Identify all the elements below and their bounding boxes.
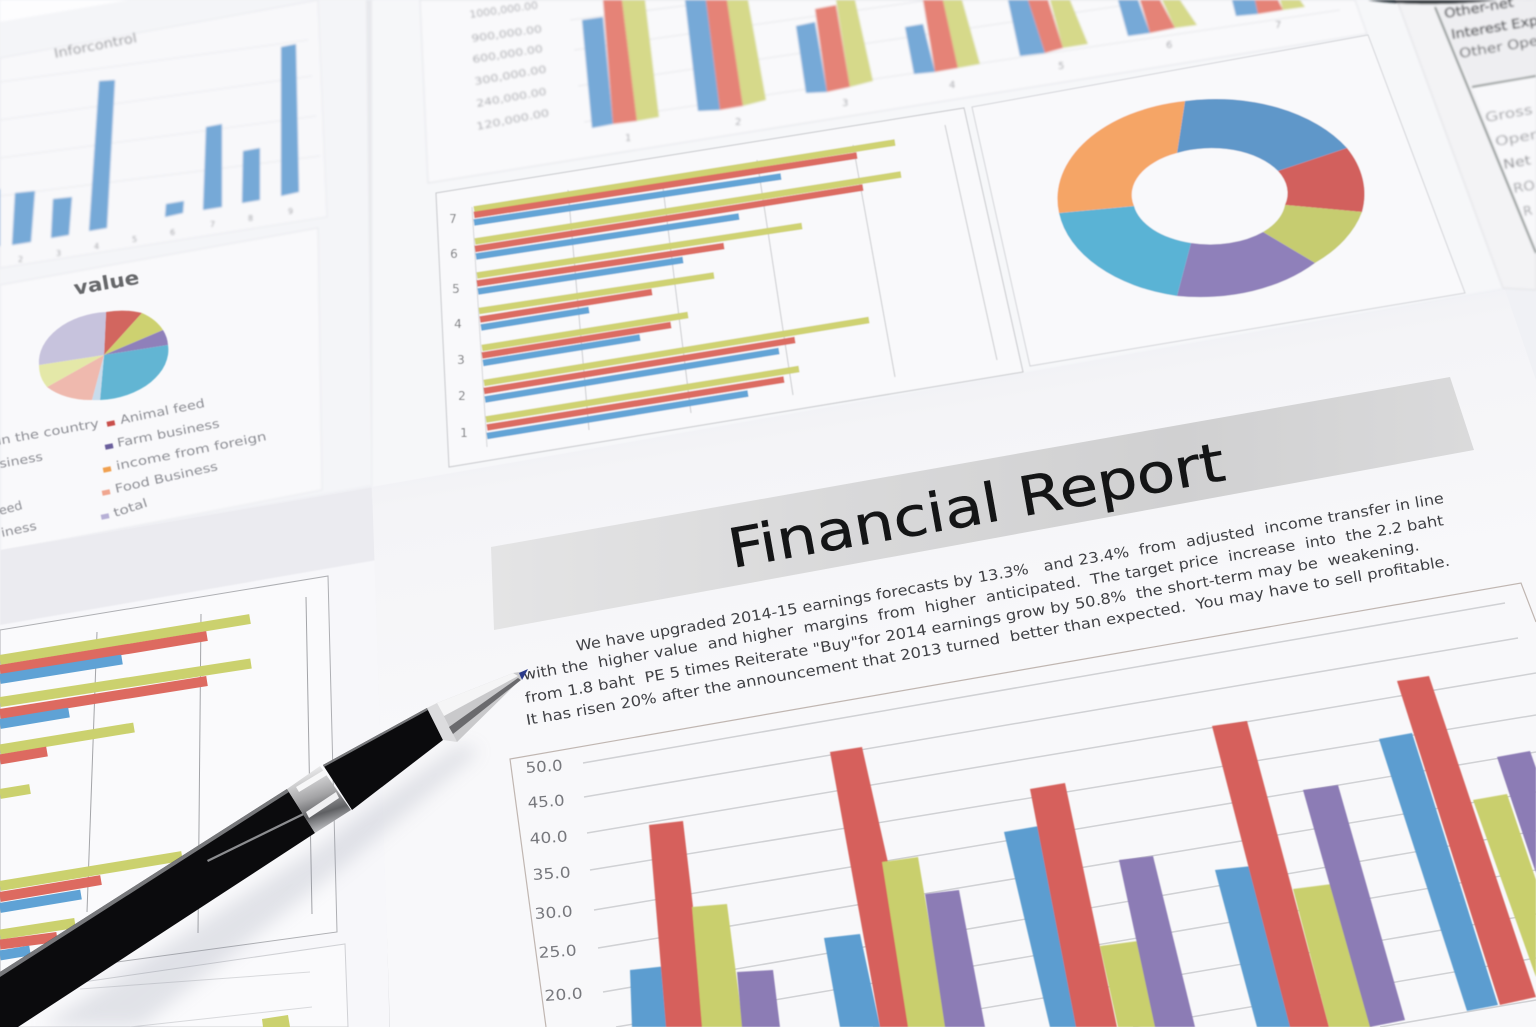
table text: Other Ope [1458,34,1536,62]
bar chart: lower-left horizontal bars [0,619,251,956]
bar chart: main report chart [630,676,1536,1027]
legend: pie chart: Food Business [114,459,219,496]
axis labels: main bar chart: 45.0 [527,791,565,812]
chart frame lines [510,583,1536,1027]
legend: pie chart: income from foreign [115,429,268,473]
axis labels: left bar chart: 4 [94,242,99,251]
pen shadow [40,745,480,1027]
pen upper barrel [323,708,443,810]
panel: pie chart and legend [0,267,268,540]
legend: pie chart: Farm business [116,416,221,450]
axis labels: top bar chart: 120,000.00 [475,108,550,133]
axis labels: left bar chart: 6 [170,228,175,237]
axis labels: top bar chart: 7 [1275,20,1281,31]
axis labels: horizontal bar chart: 3 [457,353,465,367]
axis labels: horizontal bar chart: 5 [452,282,460,296]
table text: Oper [1494,128,1536,150]
bars: purple series [737,751,1536,1027]
axis labels: left bar chart [18,207,293,264]
bars: blue series [630,733,1498,1027]
bar chart: top grouped bars [582,0,1305,128]
axis labels: top bar chart: 240,000.00 [476,87,547,110]
text block: report summary [522,491,1451,729]
axis labels: top bar chart: 1000,000.00 [469,0,539,21]
axis labels: horizontal bar chart: 6 [450,247,458,261]
table text [1443,0,1536,220]
bar chart: top-left blue bars [0,44,299,247]
legend: pie chart: total [112,496,149,520]
chart title: value: value [72,267,141,300]
panel: top-right financial table [1368,0,1536,290]
axis labels: left bar chart: 7 [210,220,215,229]
heading: Financial Report: Financial Report [723,431,1229,581]
axis labels: left bar chart: 3 [56,249,61,258]
bars: yellow series [692,794,1536,1027]
axis labels: horizontal bar chart: 7 [449,212,457,226]
table text: Interest Exp [1450,14,1536,43]
axis labels: top bar chart: 6 [1166,40,1172,51]
table text: Net [1502,153,1532,173]
axis labels: top bar chart: 5 [1058,61,1064,72]
text block: report summary: with the higher value and higher margins from higher anticipated. The target price increase into the 2.2 baht [522,513,1445,684]
axis labels: left bar chart: 5 [132,235,137,244]
axis labels: top bar chart: 900,000.00 [471,24,543,45]
axis labels: horizontal bar chart [449,212,468,440]
pen lower barrel [0,789,315,1027]
axis labels: top bar chart: 2 [735,117,741,128]
text block: report summary: It has risen 20% after the announcement that 2013 turned better than expected. You may have to sell profitable. [525,554,1451,729]
pen metal ring [287,766,351,833]
axis labels: left bar chart: 9 [288,207,293,216]
panel: top-left sheet [0,0,380,552]
panel: donut chart [972,35,1465,366]
axis labels: top bar chart: 3 [842,98,848,109]
panel: top bar chart sheet [372,0,1503,488]
axis labels: top bar chart: 1 [625,133,631,144]
legend: pie chart [0,396,268,540]
axis labels: horizontal bar chart: 2 [458,389,466,403]
bars: yellow series [474,142,901,420]
pen metal collar [427,703,457,742]
axis labels: main bar chart: 30.0 [534,902,573,923]
legend: pie chart: iness [0,519,38,540]
donut chart [1057,99,1364,297]
axis labels: main bar chart: 40.0 [529,827,568,848]
axis labels: top bar chart: 4 [949,80,955,91]
table text: R [1522,204,1534,220]
panel: main report sheet [372,290,1536,1027]
axis labels: main bar chart: 20.0 [544,984,583,1005]
dark object at top edge [1368,0,1497,4]
pie chart: value [39,311,168,400]
axis labels: main bar chart: 35.0 [532,863,571,884]
pen tip [519,669,528,680]
text block: report summary: We have upgraded 2014-15 earnings forecasts by 13.3% and 23.4% from adjusted income transfer in line [575,491,1445,655]
axis labels: main bar chart [525,756,583,1005]
bars: red series [474,156,863,428]
panel: lower-left sheet [0,487,390,1027]
axis labels: left bar chart: 2 [18,255,23,264]
bar: bottom sheet fragment [262,1015,290,1027]
chart title: left bar chart: Inforcontrol [53,31,138,62]
axis labels: horizontal bar chart: 4 [454,317,462,331]
axis labels: top bar chart [469,0,1281,144]
title band [491,377,1474,630]
gridlines: main chart [583,603,1536,1027]
table text: Gross [1484,103,1534,126]
axis labels: main bar chart: 25.0 [538,941,577,962]
bars: red series [649,676,1536,1027]
axis labels: top bar chart: 600,000.00 [472,44,544,66]
icon: ballpoint pen [0,669,528,1027]
axis labels: main bar chart: 50.0 [525,756,563,777]
axis labels: horizontal bar chart: 1 [460,426,468,440]
text block: report summary: from 1.8 baht PE 5 times Reiterate "Buy"for 2014 earnings grow by 50.8% the short-term may be weakening. [524,538,1421,707]
panel: horizontal bar chart [436,108,1023,467]
pen metal cone [437,671,526,742]
bars: blue series [474,176,781,436]
table text: RO [1512,178,1536,197]
axis labels: left bar chart: 8 [248,214,253,223]
axis labels: top bar chart: 300,000.00 [474,64,547,88]
legend: pie chart: Animal feed [119,396,206,427]
